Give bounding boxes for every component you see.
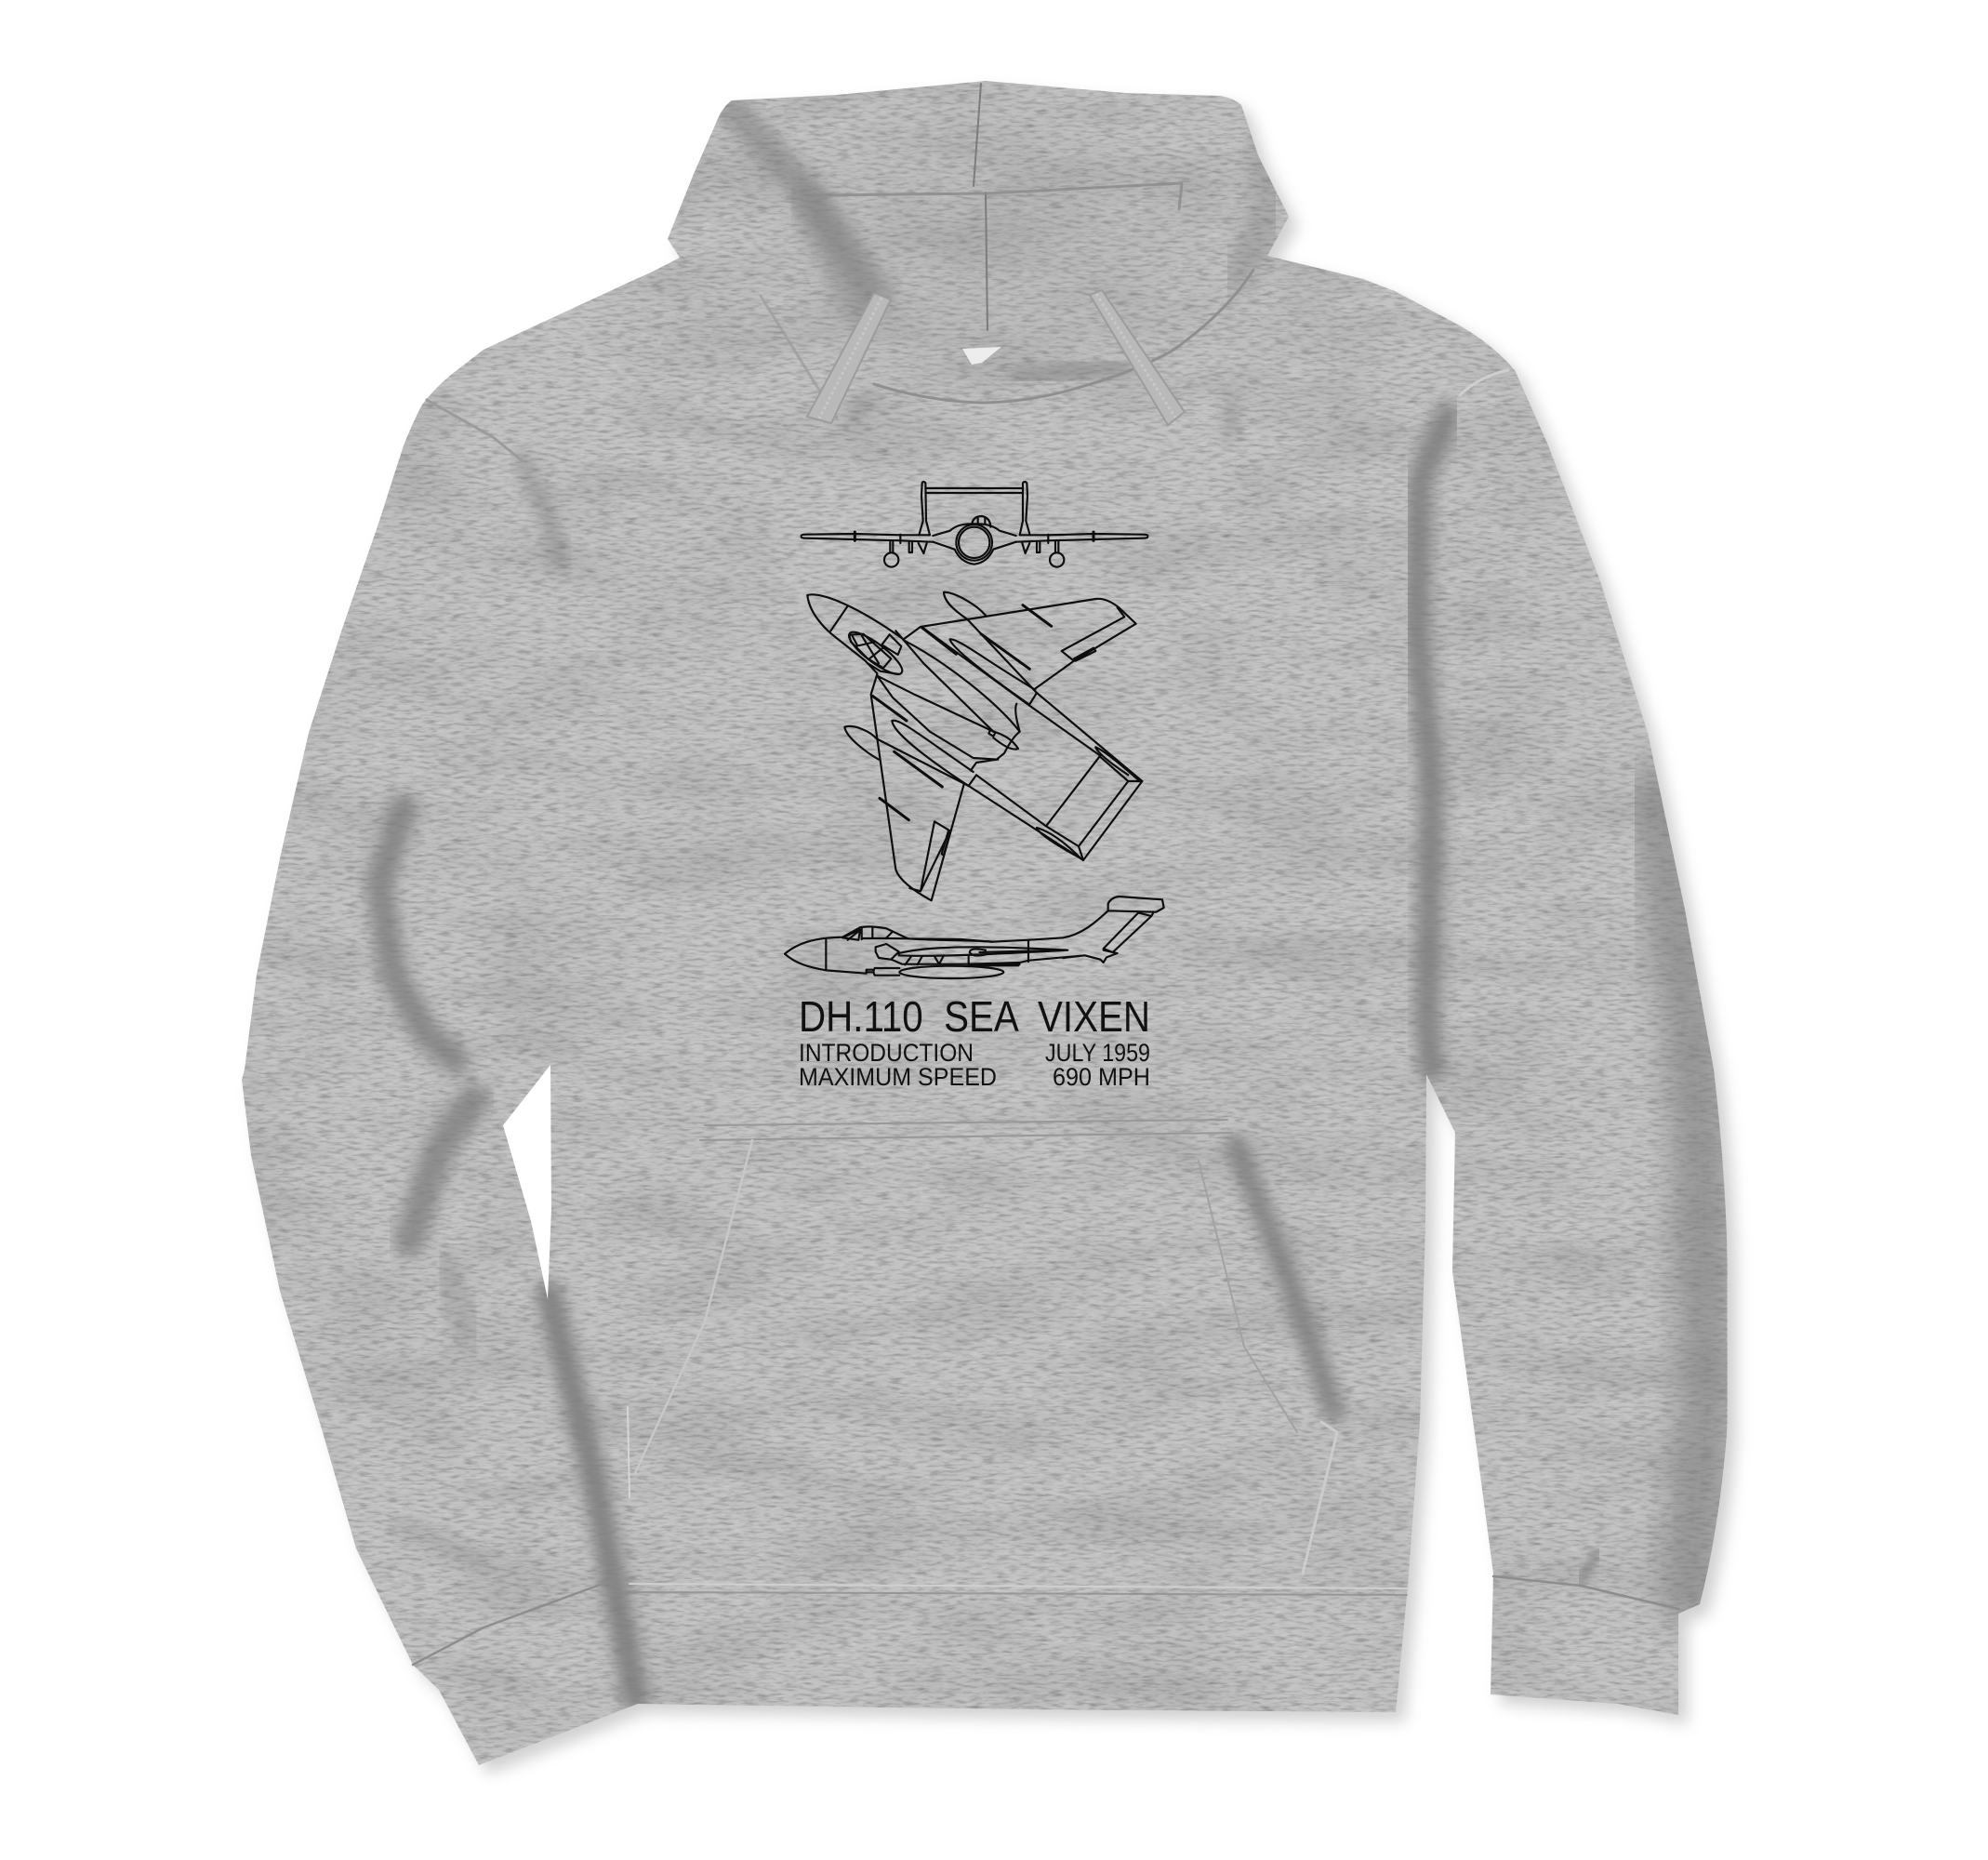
neck label (962, 347, 1001, 365)
right drawstring (1090, 290, 1185, 425)
product image: grey hoodie with aircraft print (242, 81, 1744, 1778)
fabric texture and shading (223, 74, 1748, 1776)
upper wing (904, 599, 1136, 690)
lower wing (871, 674, 964, 900)
spec label: maximum speed: MAXIMUM SPEED (799, 1063, 997, 1091)
left drawstring (807, 293, 891, 423)
plan view (807, 592, 1142, 900)
missiles (872, 605, 1052, 820)
nose and forward fuselage (807, 594, 904, 673)
drop shadow of garment (251, 90, 1737, 1774)
canopy (844, 626, 908, 680)
print title: DH.110 SEA VIXEN (799, 992, 1150, 1041)
upper boom (967, 619, 1142, 781)
hood interior shade (858, 174, 1119, 320)
spec value: speed: 690 MPH (1053, 1063, 1150, 1091)
aircraft plan and front views (802, 482, 1147, 900)
front view (802, 482, 1147, 567)
aircraft side view (785, 897, 1164, 978)
tailplane (1046, 756, 1142, 860)
silhouette (242, 81, 1728, 1765)
gaps between sleeves and body (503, 1065, 551, 1299)
spec value: introduction date: JULY 1959 (1045, 1039, 1150, 1067)
hoodie garment (223, 74, 1748, 1776)
lower boom and tanks (844, 726, 879, 760)
seams and stitching (413, 84, 1678, 1665)
spec label: introduction: INTRODUCTION (799, 1039, 974, 1067)
fuselage lines (904, 640, 1020, 770)
